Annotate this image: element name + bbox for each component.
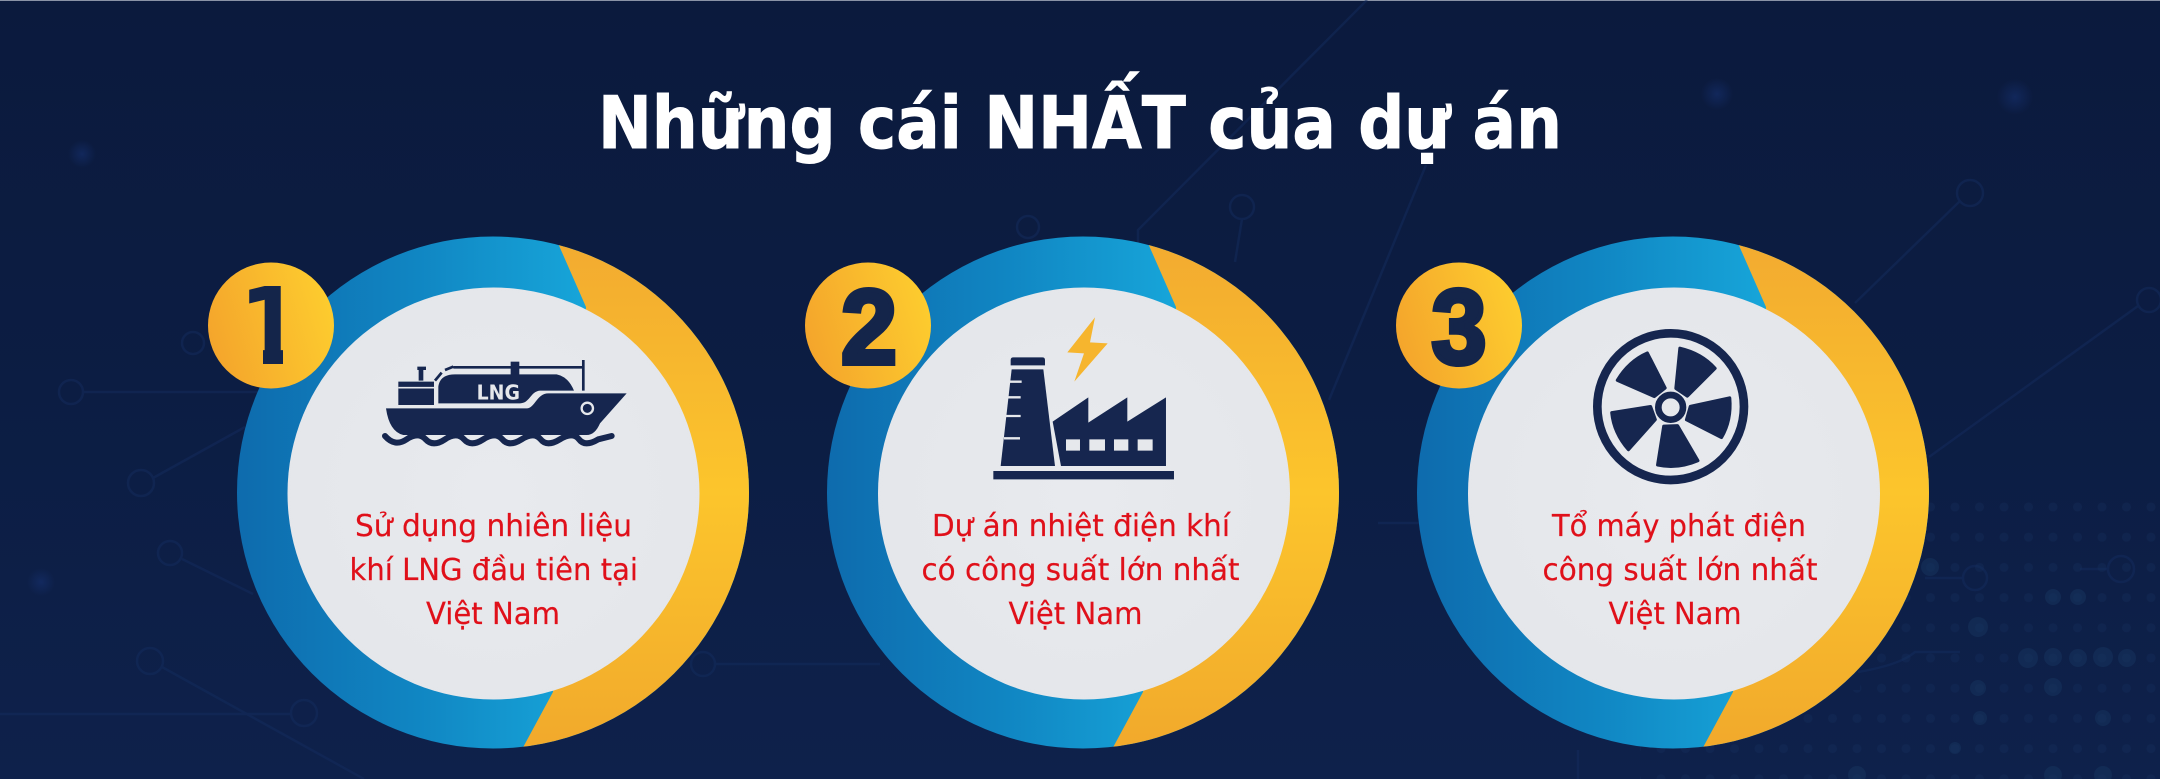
- icon: LNG ship: LNG: [477, 380, 520, 404]
- icon: power plant with lightning: [993, 317, 1174, 479]
- text 1: Sử dụng nhiên liệu: [355, 509, 632, 544]
- ring 2: [827, 236, 1339, 748]
- text 2: [922, 509, 1240, 632]
- text 2: Việt Nam: [1008, 597, 1142, 632]
- text 3: công suất lớn nhất: [1542, 553, 1818, 588]
- title: Những cái NHẤT của dự án: [598, 72, 1562, 165]
- text 3: Việt Nam: [1608, 597, 1742, 632]
- number badge 3: [1396, 262, 1522, 388]
- text 3: [1542, 508, 1818, 632]
- number badge 2: 2: [841, 268, 897, 386]
- icon: LNG ship: [385, 360, 627, 443]
- text 1: khí LNG đầu tiên tại: [350, 553, 638, 588]
- ring 3: [1417, 236, 1929, 748]
- text 1: [350, 509, 638, 632]
- text 2: Dự án nhiệt điện khí: [932, 509, 1231, 544]
- number badge 1: 1: [239, 266, 302, 390]
- ring 1: [237, 236, 749, 748]
- text 2: có công suất lớn nhất: [922, 553, 1240, 588]
- text 1: Việt Nam: [426, 597, 560, 632]
- inner disc 1: [288, 288, 700, 700]
- icon: turbine fan: [1597, 333, 1744, 481]
- text 3: Tổ máy phát điện: [1551, 508, 1806, 544]
- number badge 2: [805, 262, 931, 388]
- inner disc 3: [1468, 288, 1880, 700]
- panel: item 2: [805, 236, 1339, 748]
- number badge 1: [208, 262, 334, 390]
- panel: item 3: [1396, 236, 1929, 748]
- panel: item 1: [208, 236, 749, 748]
- number badge 3: 3: [1432, 268, 1486, 386]
- inner disc 2: [878, 288, 1290, 700]
